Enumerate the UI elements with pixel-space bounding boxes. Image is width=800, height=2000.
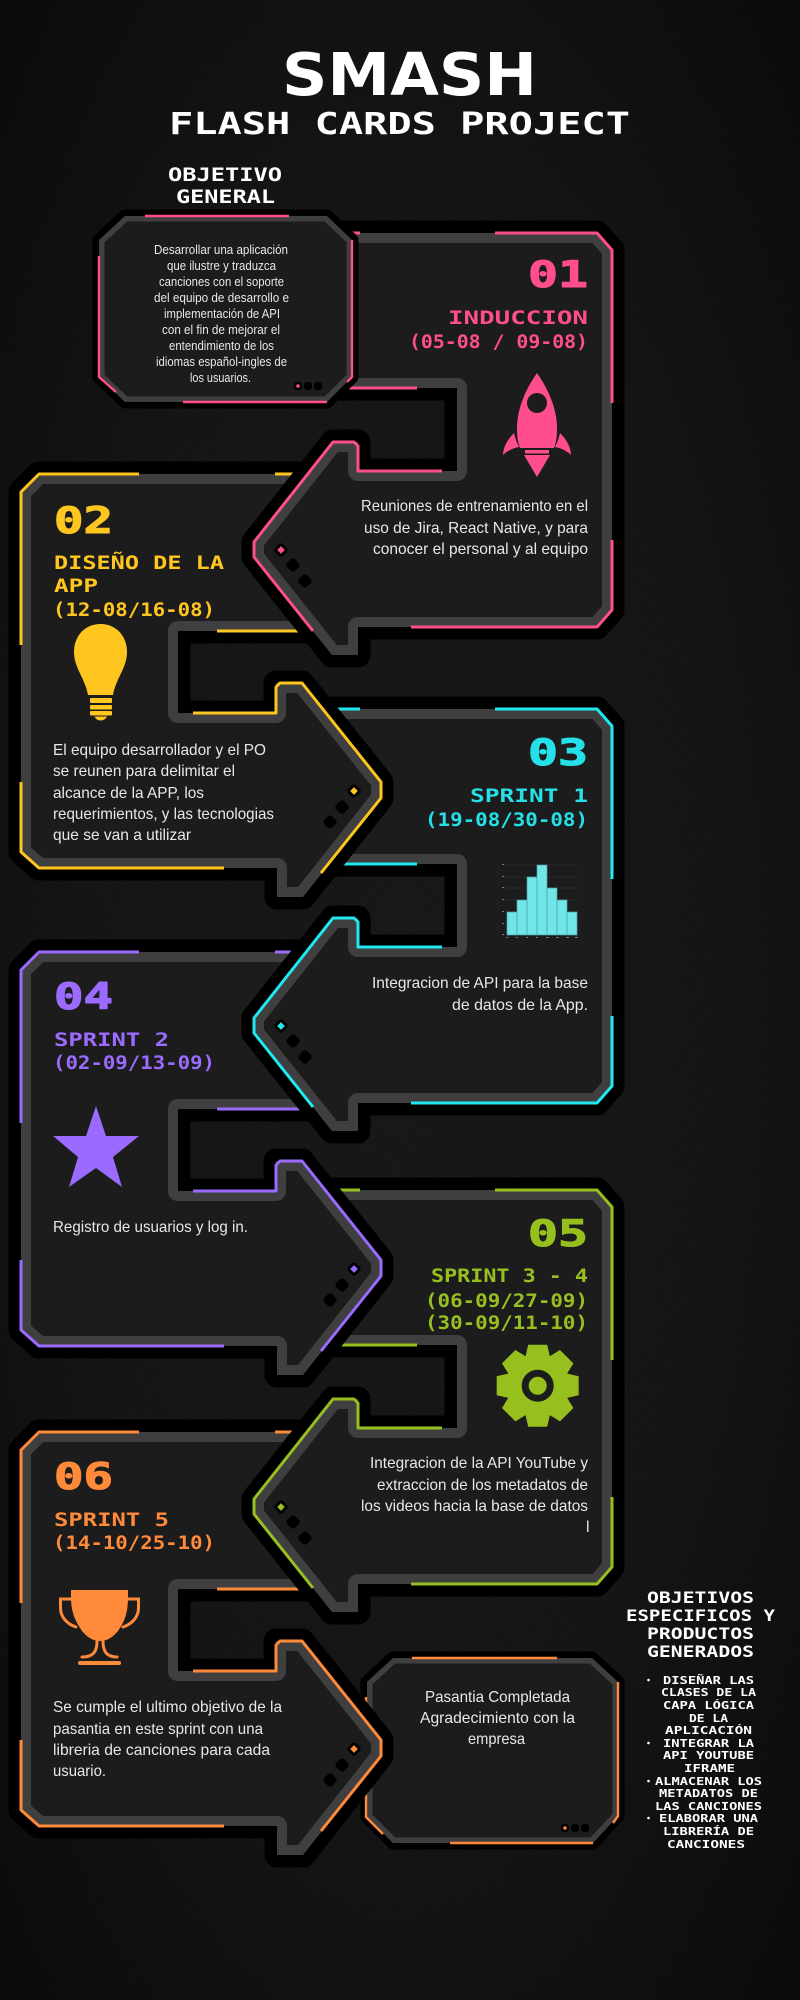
list: objetivos especificos: IFRAME xyxy=(684,1762,735,1775)
heading 03: (19-08/30-08) xyxy=(425,810,588,831)
text: pasantia completada: Pasantia Completada xyxy=(425,1689,570,1706)
heading 02 xyxy=(53,499,224,621)
chart: histogram icon xyxy=(502,864,578,938)
panel: 04 sprint 2 xyxy=(21,952,381,1375)
list: objetivos especificos: API YOUTUBE xyxy=(663,1749,754,1762)
icon: light bulb xyxy=(74,624,127,720)
list: objetivos especificos: CAPA LÓGICA xyxy=(663,1699,754,1712)
text: sprint 1 xyxy=(372,975,588,1014)
heading 01: 01 xyxy=(528,253,588,296)
heading 06: 06 xyxy=(54,1455,113,1498)
heading: objetivo general xyxy=(168,165,282,208)
text: objetivo general xyxy=(154,243,289,385)
heading: objetivos especificos: GENERADOS xyxy=(647,1642,754,1661)
heading 04: SPRINT 2 xyxy=(54,1030,169,1051)
text: objetivo general: entendimiento de los xyxy=(169,339,274,353)
list: objetivos especificos: APLICACIÓN xyxy=(665,1724,752,1737)
text: sprint 5: pasantia en este sprint con una xyxy=(53,1721,263,1738)
heading 04: 04 xyxy=(54,975,113,1018)
text: sprint 5: Se cumple el ultimo objetivo de la xyxy=(53,1699,282,1716)
heading 01 xyxy=(409,253,588,353)
list: objetivos especificos: DISEÑAR LAS xyxy=(663,1674,754,1687)
heading 06: SPRINT 5 xyxy=(54,1510,169,1531)
text: induccion: conocer el personal y al equipo xyxy=(373,541,588,558)
heading 05: SPRINT 3 - 4 xyxy=(431,1266,588,1287)
heading: objetivo general: OBJETIVO xyxy=(168,165,282,186)
panel: 05 sprint 3-4 xyxy=(254,1190,612,1612)
heading: objetivos especificos xyxy=(626,1588,776,1661)
text: sprint 3-4: Integracion de la API YouTube y xyxy=(370,1455,588,1472)
text: objetivo general: implementación de API xyxy=(164,307,280,321)
text: pasantia completada xyxy=(420,1689,575,1748)
text: sprint 2: Registro de usuarios y log in. xyxy=(53,1219,248,1236)
heading 03 xyxy=(425,731,588,831)
panel: final card pasantia completada xyxy=(366,1658,618,1843)
heading: objetivo general: GENERAL xyxy=(176,187,275,208)
text: objetivo general: con el fin de mejorar el xyxy=(162,323,280,337)
text: sprint 5: usuario. xyxy=(53,1763,106,1780)
panel: 06 sprint 5 xyxy=(21,1432,381,1855)
text: objetivo general: del equipo de desarrollo e xyxy=(154,291,289,305)
text: pasantia completada: empresa xyxy=(468,1731,525,1748)
heading 03: 03 xyxy=(528,731,588,774)
text: induccion: uso de Jira, React Native, y para xyxy=(364,520,588,537)
text: diseño de la app: requerimientos, y las tecnologias xyxy=(53,806,274,823)
dots objective card xyxy=(294,382,322,390)
text: induccion xyxy=(361,498,588,558)
accent lines final card xyxy=(366,1658,618,1843)
text: objetivo general: Desarrollar una aplicación xyxy=(154,243,288,257)
heading 05: (06-09/27-09) xyxy=(425,1291,588,1312)
heading 05: (30-09/11-10) xyxy=(425,1313,588,1334)
icon: gear xyxy=(497,1345,579,1427)
heading: objetivos especificos: ESPECIFICOS Y xyxy=(626,1606,776,1625)
list: objetivos especificos: CLASES DE LA xyxy=(661,1686,756,1699)
text: objetivo general: canciones con el soporte xyxy=(159,275,284,289)
list: objetivos especificos: METADATOS DE xyxy=(659,1787,758,1800)
heading 03: SPRINT 1 xyxy=(470,786,588,807)
title: FLASH CARDS PROJECT xyxy=(169,107,630,142)
text: sprint 3-4: los videos hacia la base de datos xyxy=(361,1498,588,1515)
text: sprint 5 xyxy=(53,1699,282,1780)
heading 01: (05-08 / 09-08) xyxy=(409,332,588,353)
text: pasantia completada: Agradecimiento con la xyxy=(420,1710,575,1727)
heading: objetivos especificos: OBJETIVOS xyxy=(647,1588,754,1607)
accent lines objective card xyxy=(99,216,352,402)
text: diseño de la app: alcance de la APP, los xyxy=(53,785,204,802)
list: objetivos especificos: LAS CANCIONES xyxy=(655,1800,762,1813)
text: objetivo general: que ilustre y traduzca xyxy=(167,259,276,273)
panel: 02 diseño de la app xyxy=(21,474,381,897)
heading 02: APP xyxy=(54,576,98,597)
heading 01: INDUCCION xyxy=(448,308,588,329)
heading 02: (12-08/16-08) xyxy=(53,600,215,621)
icon: star xyxy=(53,1106,139,1187)
text: sprint 3-4: extraccion de los metadatos de xyxy=(377,1477,588,1494)
heading 04: (02-09/13-09) xyxy=(53,1053,215,1074)
panel: 01 induccion xyxy=(254,233,612,655)
text: diseño de la app xyxy=(53,742,274,844)
text: sprint 3-4: l xyxy=(586,1519,590,1536)
dots final card xyxy=(561,1824,589,1832)
title xyxy=(169,40,630,142)
text: diseño de la app: El equipo desarrollador y el PO xyxy=(53,742,266,759)
list: objetivos especificos: ALMACENAR LOS xyxy=(655,1775,762,1788)
list: objetivos especificos: ELABORAR UNA xyxy=(659,1812,758,1825)
text: diseño de la app: se reunen para delimitar el xyxy=(53,763,235,780)
list: objetivos especificos: INTEGRAR LA xyxy=(663,1737,754,1750)
text: sprint 5: libreria de canciones para cada xyxy=(53,1742,270,1759)
list: objetivos especificos: LIBRERÍA DE xyxy=(663,1825,754,1838)
panel: 03 sprint 1 xyxy=(254,709,612,1131)
heading 06 xyxy=(53,1455,215,1554)
heading 05 xyxy=(425,1212,588,1334)
heading 02: 02 xyxy=(54,499,113,542)
text: sprint 1: Integracion de API para la base xyxy=(372,975,588,992)
title: SMASH xyxy=(282,40,537,109)
text: sprint 1: de datos de la App. xyxy=(452,997,588,1014)
heading 05: 05 xyxy=(528,1212,588,1255)
panel: objetivo general card xyxy=(99,216,352,402)
text: objetivo general: idiomas español-ingles de xyxy=(156,355,287,369)
list: objetivos especificos: CANCIONES xyxy=(667,1838,745,1851)
icon: rocket xyxy=(503,373,571,477)
heading: objetivos especificos: PRODUCTOS xyxy=(647,1624,754,1643)
heading 06: (14-10/25-10) xyxy=(53,1533,215,1554)
text: induccion: Reuniones de entrenamiento en el xyxy=(361,498,588,515)
text: sprint 3-4 xyxy=(361,1455,590,1536)
heading 02: DISEÑO DE LA xyxy=(54,551,224,574)
icon: trophy xyxy=(60,1590,138,1665)
heading 04 xyxy=(53,975,215,1074)
list: objetivos especificos: DE LA xyxy=(689,1712,728,1725)
text: objetivo general: los usuarios. xyxy=(190,371,251,385)
list: objetivos especificos xyxy=(647,1674,762,1851)
text: diseño de la app: que se van a utilizar xyxy=(53,827,192,844)
